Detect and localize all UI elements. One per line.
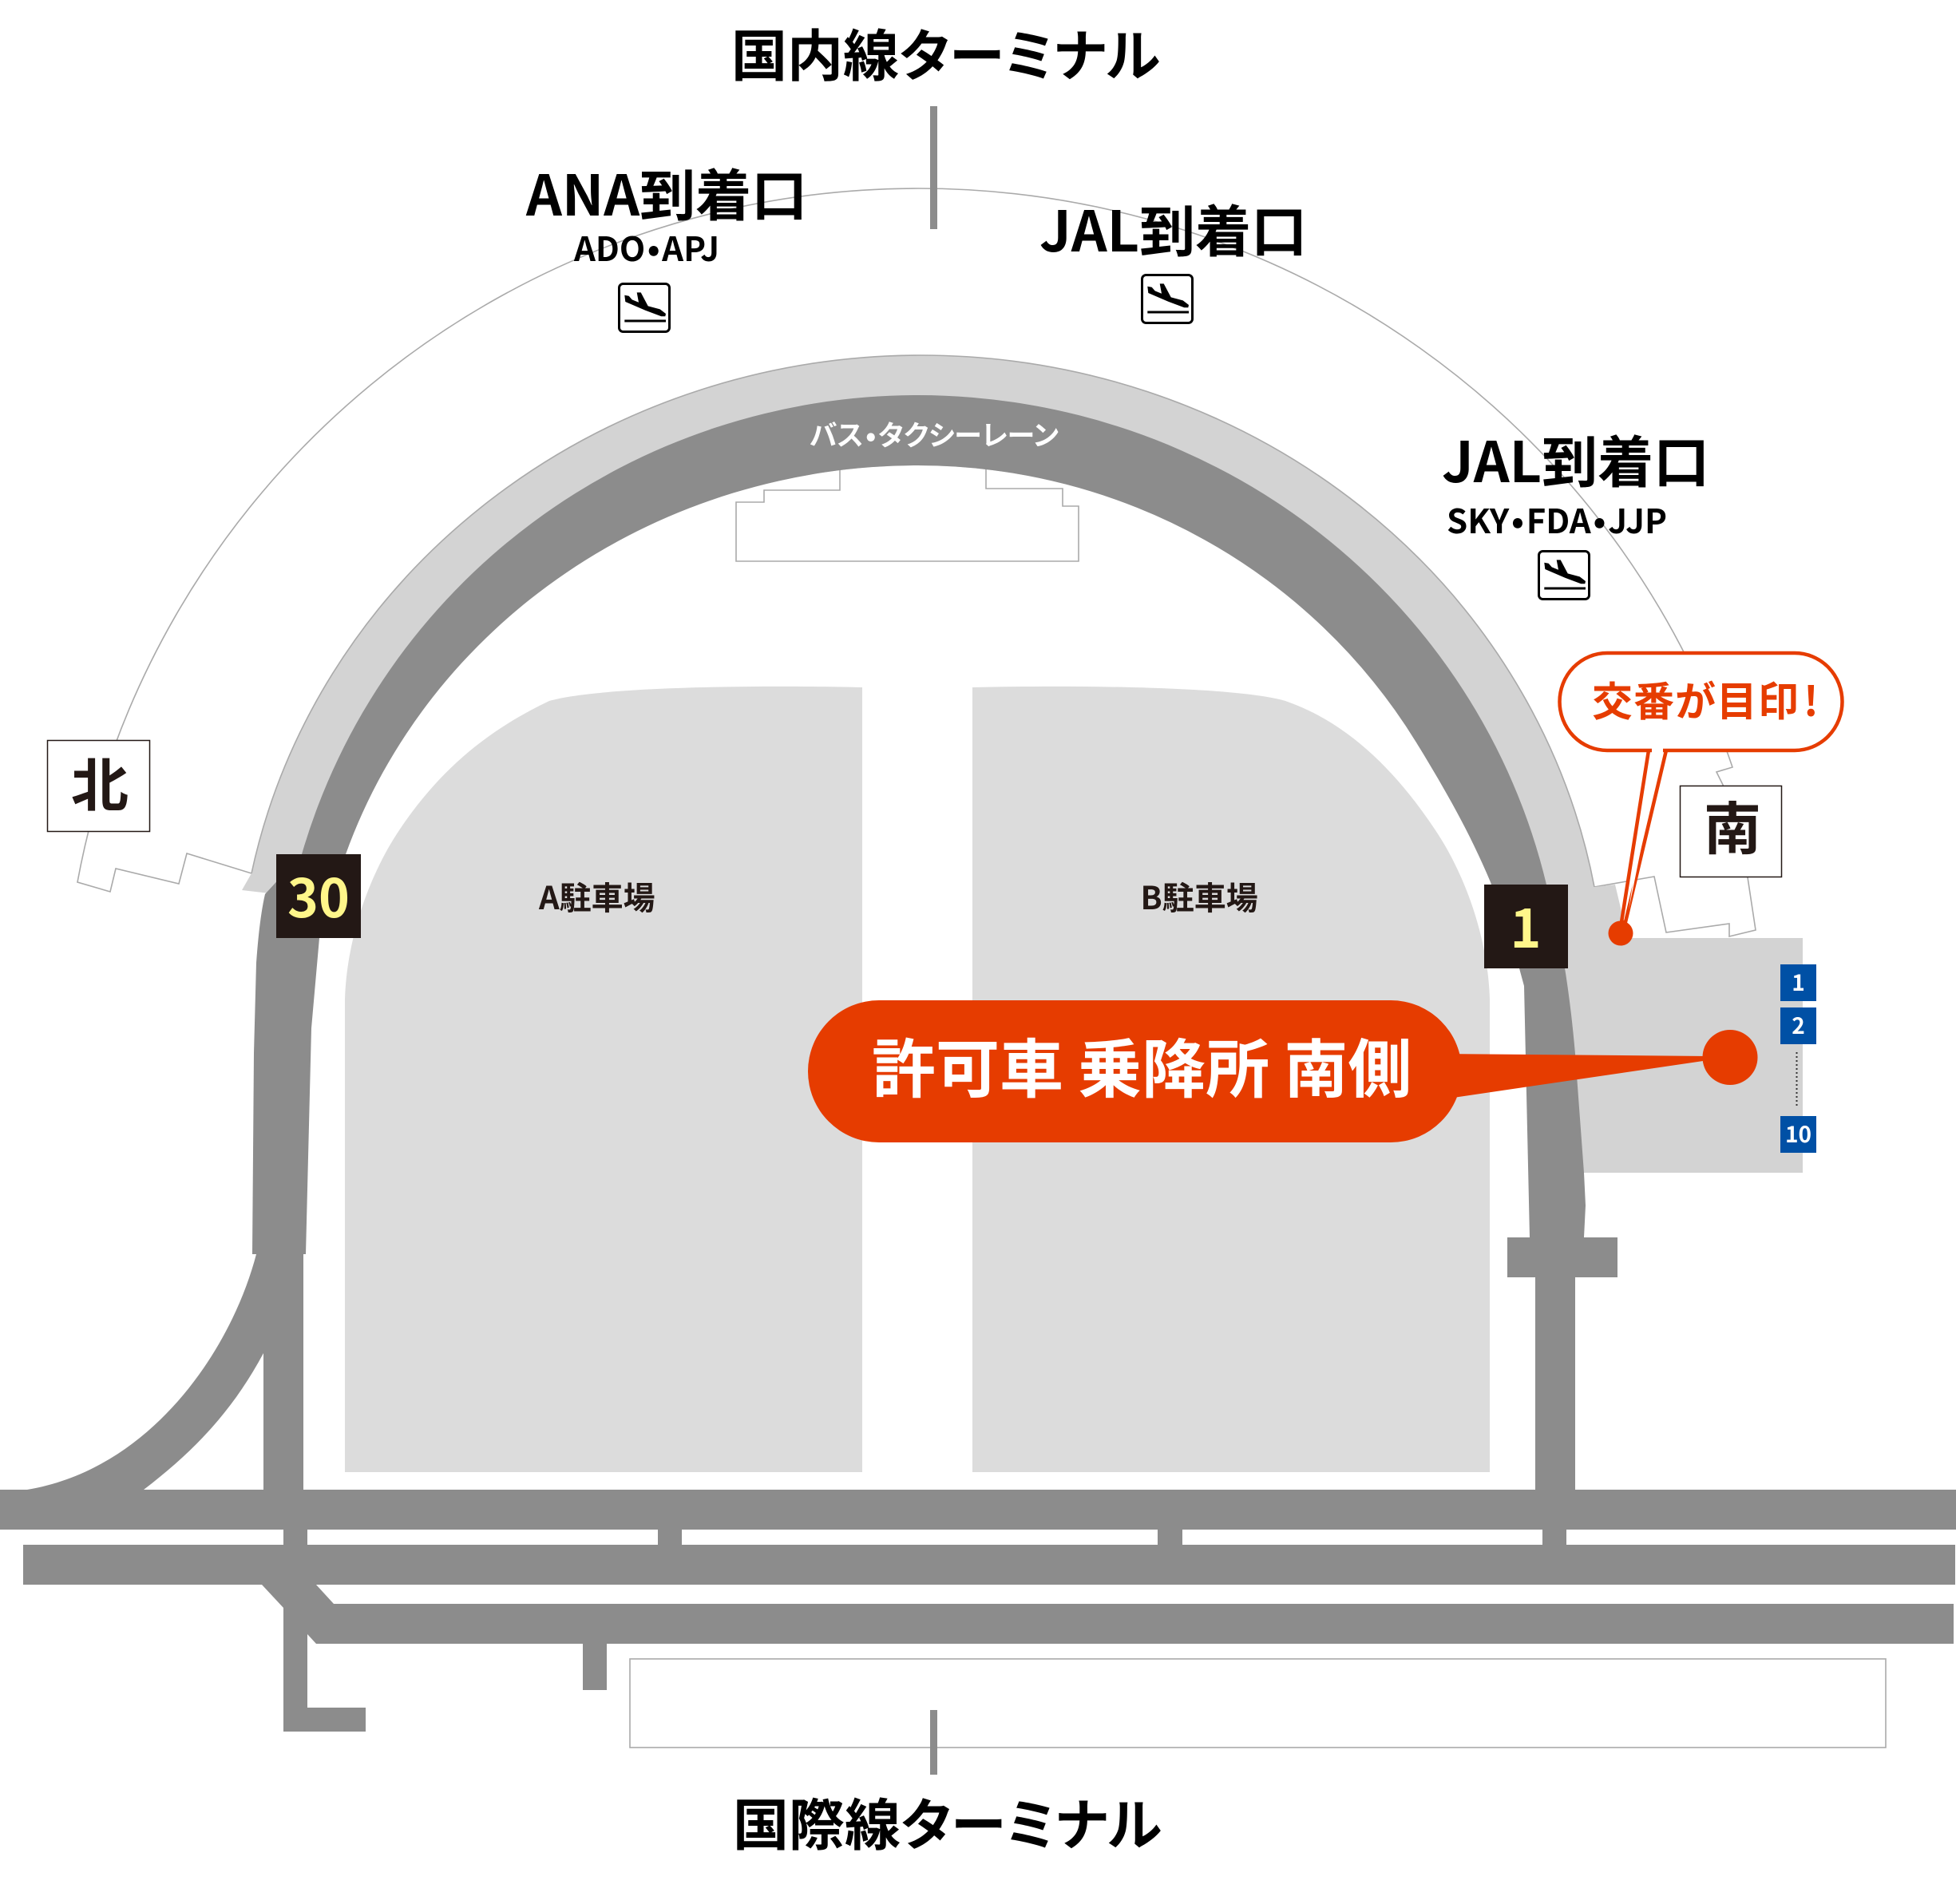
parking lot B: [972, 687, 1490, 1472]
icon: arrivals ANA: [620, 284, 669, 332]
callout: permitted vehicle pickup south side: [808, 1000, 1758, 1142]
JAL south sub airlines: SKY•FDA•JJP: [1447, 495, 1667, 544]
callout: koban landmark: [1560, 653, 1843, 945]
icon: arrivals JAL center: [1142, 275, 1193, 323]
south sign: 南: [1704, 782, 1761, 866]
blue stop 2: 2: [1792, 1009, 1805, 1041]
international terminal connector: [930, 1710, 937, 1775]
road network: [0, 1237, 1956, 1732]
ANA sub airlines: ADO•APJ: [573, 223, 719, 271]
blue stop 1: 1: [1792, 966, 1805, 998]
JAL arrivals heading center: JAL到着口: [1039, 188, 1307, 268]
blue stop 2: [1780, 1007, 1816, 1044]
curb outer edge line: [251, 355, 1594, 887]
gate badge 1: 1: [1511, 887, 1541, 964]
domestic terminal connector: [930, 106, 937, 229]
blue stop 1: [1780, 964, 1816, 1001]
south sign: [1680, 782, 1782, 877]
international terminal outline: [630, 1659, 1886, 1748]
callout: koban landmark: 交番が目印!: [1592, 669, 1819, 728]
ANA arrivals heading: ANA到着口: [525, 152, 807, 232]
terminal building outline: [77, 188, 1756, 936]
JAL arrivals heading south: JAL到着口: [1442, 418, 1709, 499]
north sign: [48, 739, 150, 832]
gate badge 30: [276, 854, 361, 938]
gate badge 1: [1484, 885, 1568, 968]
bus taxi lane label: バス•タクシーレーン: [810, 414, 1059, 454]
title: domestic terminal: 国内線ターミナル: [731, 12, 1160, 93]
parking B label: B駐車場: [1140, 873, 1258, 919]
blue stop 10: 10: [1785, 1118, 1811, 1150]
parking lot A: [345, 687, 862, 1472]
callout: permitted vehicle pickup south side: 許可車 乗降所 南側: [872, 1019, 1412, 1111]
bus and taxi lane: [252, 395, 1586, 1254]
icon: arrivals JAL south: [1539, 551, 1589, 599]
title: international terminal: 国際線ターミナル: [733, 1781, 1162, 1862]
north sign: 北: [71, 739, 129, 823]
light grey curb band and south pickup area: [242, 355, 1803, 1173]
blue stop 10: [1780, 1116, 1816, 1153]
dotted stop range: [1796, 1052, 1798, 1108]
parking A label: A駐車場: [538, 873, 655, 919]
domestic terminal inner building outline: [736, 463, 1079, 561]
gate badge 30: 30: [287, 857, 350, 933]
